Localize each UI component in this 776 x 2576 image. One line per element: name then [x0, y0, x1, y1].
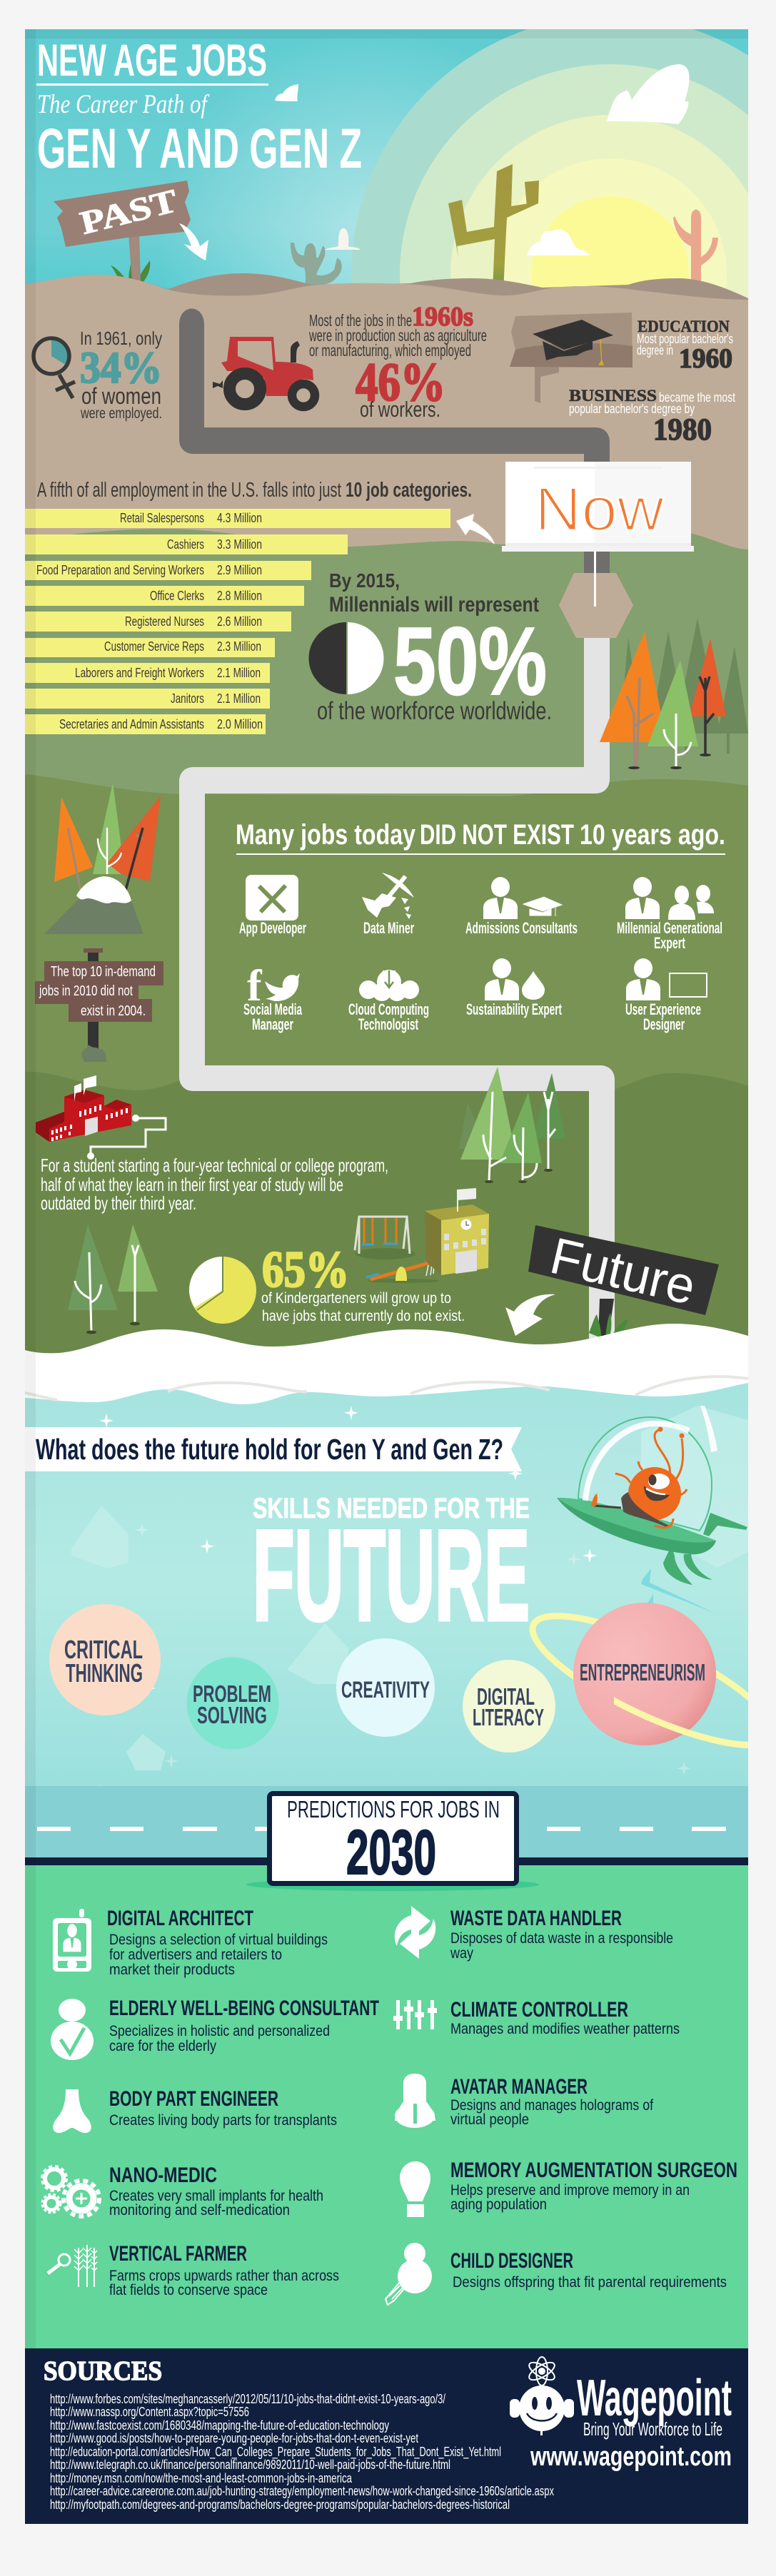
job: social media manager: Social Media — [243, 1000, 302, 1018]
panel: mid green hill — [25, 774, 748, 1099]
job: child designer — [386, 2243, 727, 2305]
planet: entrepreneurism — [518, 1593, 776, 1768]
job: social media manager — [243, 962, 302, 1033]
text block: source links: http://money.msn.com/now/the-most-and-least-common-jobs-in-america — [50, 2471, 353, 2485]
sign: now — [502, 462, 694, 607]
bar chart: job categories: Customer Service Reps — [104, 639, 204, 654]
job: waste data handler: Disposes of data waste in a responsible — [450, 1930, 673, 1947]
icon: tractor — [213, 337, 315, 407]
stat: 1960s jobs: of workers. — [360, 397, 440, 422]
job: vertical farmer: Farms crops upwards rather than across — [109, 2268, 339, 2284]
stat: kindergarteners — [189, 1241, 465, 1324]
sign: predictions 2030: 2030 — [346, 1817, 436, 1887]
icon: red school — [36, 1075, 131, 1142]
bar chart: job categories: Registered Nurses — [125, 614, 204, 629]
stat: education: Most popular bachelor's — [637, 332, 733, 346]
job: elderly well-being consultant: Specializes in holistic and personalized — [109, 2023, 330, 2039]
stat: millennials — [308, 569, 552, 725]
icon: large cloud — [607, 64, 690, 124]
sign: top 10 in-demand: The top 10 in-demand — [51, 964, 156, 980]
streaks — [641, 1568, 714, 1613]
job: waste data handler — [395, 1906, 673, 1962]
bar chart: job categories: Food Preparation and Serving Workers — [36, 563, 204, 577]
planet: creativity — [336, 1638, 435, 1737]
stat: kindergarteners: of Kindergarteners will grow up to — [261, 1290, 451, 1307]
bar chart: job categories: Laborers and Freight Workers — [75, 666, 204, 680]
job: climate controller: Manages and modifies weather patterns — [450, 2021, 680, 2037]
icon: avatar — [395, 2074, 435, 2128]
stat: millennials: By 2015, — [329, 569, 400, 592]
connector line — [91, 1118, 166, 1156]
heading: skills for the future — [253, 1493, 530, 1648]
job: millennial generational expert — [617, 877, 722, 952]
icon: recycle arrows — [395, 1906, 435, 1959]
text block: source links: http://www.fastcoexist.com/1680348/mapping-the-future-of-education-technology — [50, 2418, 389, 2433]
stat: 1960s jobs: 1960s — [412, 302, 473, 332]
legs — [663, 1513, 747, 1585]
job: child designer: Designs offspring that fit parental requirements — [453, 2274, 727, 2291]
job: memory augmentation surgeon: Helps preserve and improve memory in an — [450, 2182, 690, 2199]
job: data miner: Data Miner — [363, 919, 414, 937]
job: climate controller: CLIMATE CONTROLLER — [450, 1998, 628, 2022]
text block: outdated learning: half of what they learn in their first year of study will be — [41, 1174, 343, 1195]
job: waste data handler: WASTE DATA HANDLER — [450, 1907, 622, 1930]
logo: wagepoint — [510, 2357, 732, 2472]
bar chart: job categories: 2.9 Million — [217, 563, 262, 577]
job: nano-medic: monitoring and self-medication — [109, 2202, 290, 2218]
text block: outdated learning: outdated by their third year. — [41, 1192, 196, 1214]
job: social media manager: Manager — [252, 1015, 293, 1033]
job: child designer: CHILD DESIGNER — [450, 2249, 573, 2273]
job: climate controller — [393, 1998, 680, 2037]
icon: female symbol — [34, 338, 75, 398]
sign: top 10 in-demand: jobs in 2010 did not — [39, 983, 133, 999]
icon: seesaw — [366, 1258, 439, 1283]
panel: future sky — [25, 1377, 748, 1788]
job: cloud computing technologist: Technologist — [358, 1015, 418, 1033]
sign: graduation board — [510, 313, 633, 403]
job: vertical farmer — [48, 2242, 339, 2298]
back dunes — [66, 273, 748, 300]
icon: person with check — [51, 1999, 94, 2060]
job: memory augmentation surgeon — [400, 2159, 737, 2217]
text block: source links: http://career-advice.careerone.com.au/job-hunting-strategy/employment-news/how-work-changed-since-1960s/article.aspx — [50, 2484, 554, 2498]
job: app developer: App Developer — [239, 919, 306, 937]
job: nano-medic: NANO-MEDIC — [109, 2164, 217, 2187]
job: data miner — [362, 873, 414, 937]
sign: top 10 in-demand — [35, 948, 163, 1062]
heading: sources: SOURCES — [44, 2356, 162, 2386]
job: elderly well-being consultant: ELDERLY WELL-BEING CONSULTANT — [109, 1997, 379, 2020]
text block: source links: http://www.forbes.com/sites/meghancasserly/2012/05/11/10-jobs-that-didnt-exist-10-years-ago/3/ — [50, 2392, 445, 2406]
icon: small pale cloud — [325, 228, 361, 250]
job: avatar manager: Designs and manages holograms of — [450, 2097, 653, 2114]
bar chart: job categories: 3.3 Million — [217, 537, 262, 552]
job: nano-medic — [42, 2164, 323, 2218]
title: The Career Path of — [37, 90, 210, 119]
icon: small cloud bird — [275, 84, 298, 101]
text block: outdated learning: For a student starting a four-year technical or college program, — [41, 1155, 388, 1176]
stat: education: became the most — [659, 390, 735, 405]
sign: past: PAST — [76, 182, 181, 241]
bar chart: job categories: Janitors — [171, 691, 204, 706]
bar chart: job categories — [25, 509, 450, 734]
job: user experience designer: Designer — [643, 1015, 685, 1033]
icon: small cactus — [291, 243, 342, 285]
icon: mountain — [44, 876, 143, 934]
heading: ten job categories: A fifth of all employment in the U.S. falls into just — [37, 479, 341, 502]
stat: education: 1980 — [653, 413, 712, 447]
job: admissions consultants — [465, 877, 578, 937]
bar chart: job categories: 2.3 Million — [217, 639, 261, 654]
job: avatar manager: AVATAR MANAGER — [450, 2075, 588, 2099]
job: digital architect: Designs a selection of virtual buildings — [109, 1932, 328, 1948]
arrow: past down — [179, 223, 208, 260]
planet: critical thinking — [49, 1604, 161, 1715]
heading: many jobs: 10 years ago. — [580, 819, 725, 851]
sign: past — [54, 181, 191, 282]
stat: millennials: 50% — [393, 607, 547, 715]
banner: future question: What does the future hold for Gen Y and Gen Z? — [36, 1433, 503, 1466]
job: elderly well-being consultant — [51, 1997, 379, 2060]
text block: source links: http://www.nassp.org/Content.aspx?topic=57556 — [50, 2405, 249, 2419]
stat: millennials: of the workforce worldwide. — [317, 697, 552, 725]
arrow: future down — [505, 1294, 555, 1336]
stars — [93, 1406, 691, 1798]
panel: sand ground — [25, 275, 748, 549]
icon: grass — [111, 260, 150, 282]
planet: digital literacy: DIGITAL — [477, 1683, 535, 1710]
sign: predictions 2030 — [246, 1794, 539, 1891]
planet: digital literacy: LITERACY — [473, 1704, 544, 1730]
bar chart: job categories: Secretaries and Admin Assistants — [59, 717, 204, 731]
job: cloud computing technologist — [348, 970, 429, 1033]
stat: education: popular bachelor's degree by — [569, 402, 695, 416]
panel: footer — [25, 2348, 748, 2524]
heading: ten job categories: 10 job categories. — [346, 479, 472, 502]
job: digital architect — [53, 1907, 328, 1978]
bar chart: job categories: Retail Salespersons — [120, 511, 204, 525]
bar chart: job categories: Office Clerks — [150, 589, 204, 603]
stat: 1960s jobs: 46% — [356, 353, 445, 412]
panel: lower green hill — [25, 1072, 748, 1356]
stat: women 1961 — [34, 328, 162, 422]
job: digital architect: DIGITAL ARCHITECT — [107, 1907, 253, 1930]
job: sustainability expert — [466, 958, 562, 1018]
icon: bone — [53, 2089, 91, 2133]
icon: smiling head — [510, 2385, 574, 2435]
planet: problem solving: SOLVING — [197, 1702, 267, 1728]
job: social media manager: f — [247, 962, 263, 1010]
stat: kindergarteners: 65% — [262, 1241, 349, 1298]
road: past section — [179, 308, 610, 578]
job: memory augmentation surgeon: aging population — [450, 2196, 547, 2213]
text block: source links — [50, 2392, 554, 2512]
sun with halos — [351, 29, 748, 298]
heading: skills for the future: FUTURE — [253, 1503, 530, 1648]
bar chart: job categories: 2.0 Million — [217, 717, 263, 731]
hexagon marker — [559, 573, 633, 638]
white wave divider — [25, 1324, 748, 1404]
icon: atom — [527, 2357, 557, 2385]
trees: mountain — [44, 783, 161, 934]
job: sustainability expert: Sustainability Expert — [466, 1000, 562, 1018]
stat: women 1961: were employed. — [80, 405, 162, 422]
job: body part engineer: Creates living body parts for transplants — [109, 2112, 337, 2129]
sign: top 10 in-demand: exist in 2004. — [81, 1003, 146, 1019]
stat: kindergarteners: have jobs that currently do not exist. — [262, 1308, 465, 1324]
panel: green hill — [25, 528, 748, 806]
title — [36, 44, 361, 168]
panel: new job icons — [239, 873, 722, 1033]
stat: education: 1960 — [679, 343, 732, 374]
sign: now: Now — [535, 475, 665, 544]
alien — [591, 1427, 687, 1528]
sign: future — [528, 1225, 719, 1339]
dome — [578, 1417, 712, 1531]
illustration: alien in spaceship — [557, 1406, 747, 1613]
trees: lower left — [68, 1224, 158, 1334]
stat: millennials: Millennials will represent — [329, 593, 539, 617]
sign: predictions 2030: PREDICTIONS FOR JOBS IN — [287, 1796, 500, 1822]
stat: 1960s jobs — [308, 302, 487, 422]
saucer — [557, 1498, 716, 1554]
icon: sliders — [393, 2000, 437, 2029]
stat: education: EDUCATION — [638, 318, 730, 335]
job: nano-medic: Creates very small implants for health — [109, 2188, 323, 2204]
icon: magnifier and wheat — [48, 2245, 97, 2287]
job: elderly well-being consultant: care for the elderly — [109, 2038, 216, 2054]
bar chart: job categories: 2.8 Million — [217, 589, 262, 603]
stat: education — [569, 318, 735, 447]
road band — [25, 1786, 748, 1865]
planet: problem solving — [187, 1657, 278, 1750]
planet: digital literacy — [463, 1660, 555, 1753]
job: digital architect: for advertisers and retailers to — [109, 1947, 282, 1963]
stat: women 1961: 34% — [80, 344, 162, 392]
text block: source links: http://www.good.is/posts/how-to-prepare-young-people-for-jobs-that-don-t-even-exist-yet — [50, 2431, 418, 2445]
bar chart: job categories: 2.1 Million — [217, 691, 261, 706]
stat: education: BUSINESS — [569, 387, 657, 405]
heading: many jobs: DID NOT EXIST — [420, 819, 574, 851]
job: body part engineer: BODY PART ENGINEER — [109, 2087, 278, 2111]
title: NEW AGE JOBS — [37, 36, 267, 86]
job: digital architect: market their products — [109, 1962, 235, 1978]
stat: 1960s jobs: or manufacturing, which employed — [309, 341, 471, 360]
stat: 1960s jobs: were in production such as agriculture — [308, 326, 487, 345]
icon: half circle — [308, 622, 384, 694]
stat: women 1961: of women — [81, 383, 161, 409]
stat: education: degree in — [637, 343, 673, 358]
predictions: jobs list — [42, 1906, 737, 2305]
icon: cloud on sun — [527, 229, 590, 255]
trees: right forest — [600, 618, 748, 769]
bar chart: job categories: 2.1 Million — [217, 666, 261, 680]
heading: skills for the future: SKILLS NEEDED FOR THE — [253, 1493, 530, 1524]
panel: past sky — [25, 29, 748, 298]
icon: light bulb — [400, 2161, 430, 2217]
job: app developer — [239, 875, 306, 937]
icon: swing set — [355, 1217, 415, 1259]
planet: creativity: CREATIVITY — [341, 1677, 430, 1703]
job: admissions consultants: Admissions Consultants — [465, 919, 578, 937]
icon: pie chart — [189, 1257, 256, 1324]
bar chart: job categories: 2.6 Million — [217, 614, 262, 629]
job: cloud computing technologist: Cloud Computing — [348, 1000, 429, 1018]
icon: pink cactus — [673, 210, 718, 282]
job: avatar manager — [395, 2074, 653, 2128]
job: vertical farmer: flat fields to conserve space — [109, 2282, 268, 2298]
bar chart: job categories: Cashiers — [167, 537, 204, 552]
text block: source links: http://www.telegraph.co.uk/finance/personalfinance/9892011/10-well-paid-jobs-of-the-future.html — [50, 2458, 450, 2472]
job: vertical farmer: VERTICAL FARMER — [109, 2242, 247, 2266]
job: waste data handler: way — [450, 1945, 473, 1962]
icon: graduation cap — [533, 320, 613, 365]
text block: source links: http://myfootpath.com/degrees-and-programs/bachelors-degree-programs/popular-bachelors-degrees-historical — [50, 2498, 510, 2512]
job: avatar manager: virtual people — [450, 2111, 529, 2128]
bar chart: job categories: 4.3 Million — [217, 511, 262, 525]
planet: critical thinking: THINKING — [66, 1658, 143, 1688]
job: body part engineer — [53, 2087, 337, 2133]
planets: skills — [49, 1593, 776, 1768]
stat: women 1961: In 1961, only — [80, 328, 162, 349]
job: user experience designer — [625, 958, 707, 1033]
arrow: now to list — [456, 514, 495, 544]
panel: predictions background — [25, 1865, 748, 2348]
trees: center group — [459, 1067, 565, 1183]
text block: outdated learning — [41, 1155, 388, 1214]
planet: critical thinking: CRITICAL — [64, 1635, 143, 1664]
text block: source links: http://education-portal.com/articles/How_Can_Colleges_Prepare_Students_for_Jobs_That_Dont_Exist_Yet.html — [50, 2445, 501, 2460]
planet: problem solving: PROBLEM — [193, 1680, 271, 1707]
heading: many jobs: Many jobs today — [236, 819, 416, 851]
icon: tall cactus — [448, 164, 539, 281]
icon: child with pencil — [386, 2243, 432, 2305]
icon: gears — [42, 2166, 99, 2216]
heading: many jobs — [236, 819, 725, 855]
sign: future: Future — [545, 1227, 700, 1316]
stat: 1960s jobs: Most of the jobs in the — [309, 311, 412, 330]
job: user experience designer: User Experience — [625, 1000, 701, 1018]
icon: yellow school — [425, 1188, 489, 1275]
job: millennial generational expert: Expert — [654, 934, 685, 952]
banner: future question — [25, 1427, 522, 1471]
icon: phone — [53, 1909, 91, 1972]
road: present section — [179, 635, 615, 1342]
title: GEN Y AND GEN Z — [37, 116, 362, 180]
